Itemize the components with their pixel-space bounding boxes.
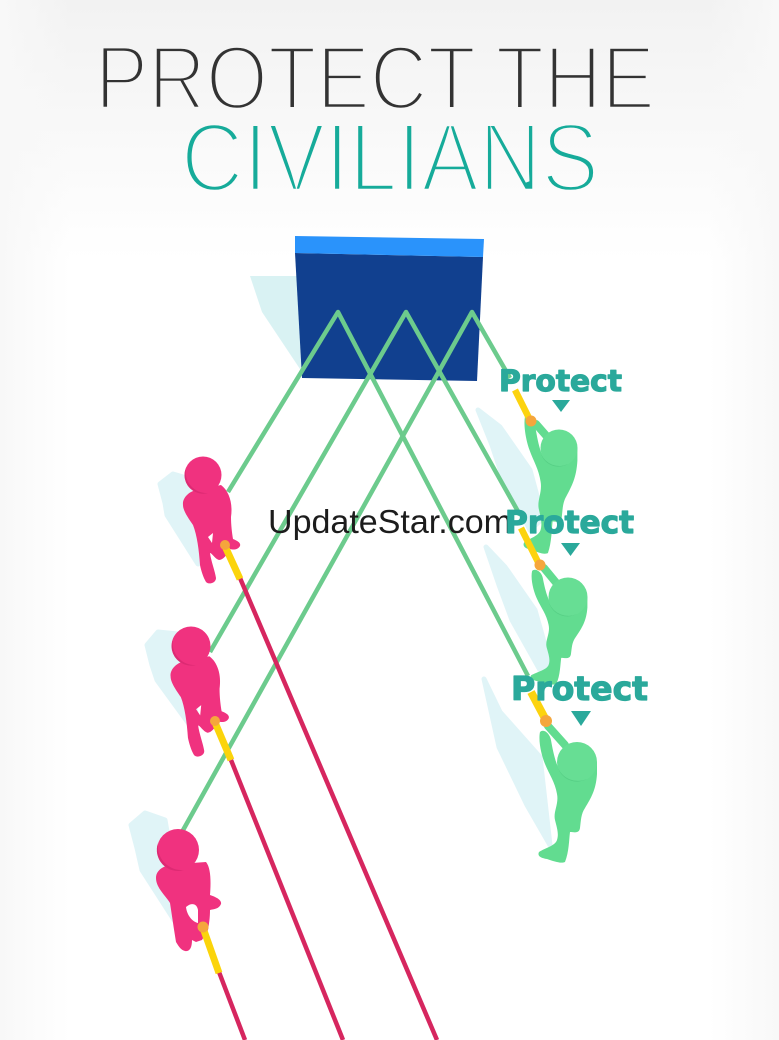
green laser beams [182, 312, 528, 832]
protect label 3 [511, 669, 648, 726]
protect label 3: Protect [511, 669, 648, 708]
character shadows [131, 410, 550, 926]
wall shadow [250, 276, 302, 372]
green civilian 1 [515, 390, 578, 554]
protect label 2: Protect [505, 505, 634, 541]
title line: PROTECT THE: PROTECT THE [95, 28, 655, 129]
pink shooter 2 [171, 626, 231, 760]
protect label 1: Protect [499, 364, 622, 398]
title line: CIVILIANS: CIVILIANS [181, 103, 599, 212]
protect label 1 [499, 364, 622, 412]
red laser beams [219, 578, 437, 1040]
pink shooter 3 [156, 829, 221, 973]
pink shooter 1 [183, 456, 240, 583]
watermark: UpdateStar.com [268, 503, 512, 540]
green civilian 3 [531, 692, 597, 863]
green civilian 2 [521, 528, 588, 685]
blue wall [295, 236, 484, 381]
title [95, 28, 655, 212]
